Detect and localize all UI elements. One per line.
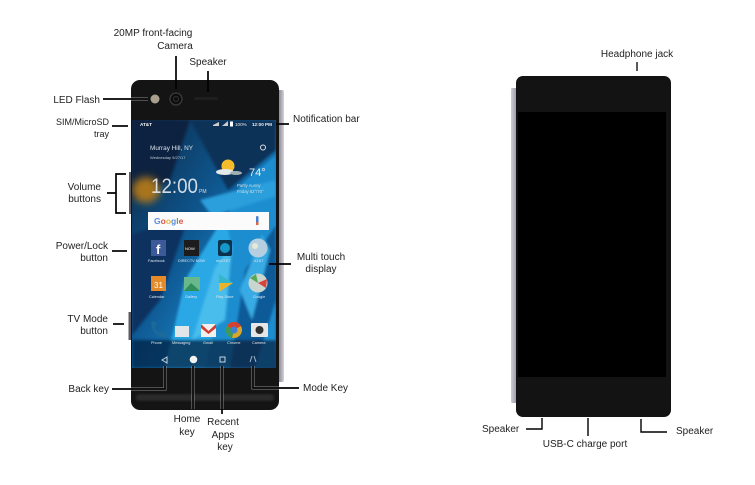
weather icon [222,160,234,172]
callout: headphone jack [601,49,674,71]
side frame [276,90,284,382]
app icons row 1: Facebook [148,259,165,263]
right phone [511,76,671,417]
clock and weather widget: Friday 82°/70° [237,189,264,194]
callout: power/lock button: Power/Lock [56,241,109,252]
screen [132,120,276,368]
callout: right speaker: Speaker [676,426,714,437]
black panel [518,112,666,377]
app icons row 2: Google [253,295,265,299]
app icons dock: Messaging [172,341,190,345]
status bar: 12:00 PM [252,122,272,127]
app icons row 1: AT&T [254,259,264,263]
Google search bar [148,212,269,230]
phone body [516,76,671,417]
callout: headphone jack: Headphone jack [601,49,674,60]
callout: notification bar: Notification bar [293,114,360,125]
callout: multi touch display: Multi touch [297,252,345,263]
status bar: AT&T [140,122,152,127]
callout: 20MP front-facing camera: Camera [157,41,193,52]
callout: SIM tray: tray [94,129,109,139]
app icons dock: Chrome [227,341,241,345]
navigation keys [162,356,256,363]
app icons row 1: f [156,242,161,257]
left phone [128,80,284,410]
callout: speaker: Speaker [189,57,227,68]
Google search bar: Google [154,216,184,226]
callout: back key [68,366,165,395]
callout: TV mode button [67,314,124,337]
orange wallpaper glow [132,177,160,203]
callout: power/lock button [56,241,127,264]
app icons dock: Camera [252,341,266,345]
clock and weather widget: 74° [249,167,266,179]
app icons row 2: 31 [154,281,163,290]
status bar: 100% [235,122,247,127]
app icons dock: Phone [151,341,162,345]
callout: recent apps key: Apps [212,430,234,441]
callout: left speaker: Speaker [482,424,520,435]
callout: 20MP front-facing camera: 20MP front-facing [114,28,192,39]
callout: LED flash: LED Flash [53,95,100,106]
callout: LED flash [53,95,148,106]
clock and weather widget: Murray Hill, NY [150,145,194,152]
earpiece speaker [194,97,218,100]
app icons dock: Gmail [203,341,213,345]
callout: left speaker [482,418,542,435]
app icons row 2: Calendar [149,295,165,299]
callout: volume buttons: buttons [68,194,101,205]
callout: home key [174,366,201,438]
wallpaper feathers [132,120,276,368]
callout: power/lock button: button [80,253,108,264]
callout: home key: Home [174,414,201,425]
callout: volume buttons [68,174,126,213]
callout: SIM tray [56,117,128,139]
callout: home key: key [179,427,195,438]
app icons row 1 [148,238,268,263]
app icons row 2 [149,274,268,299]
clock and weather widget: Wednesday 9/27/17 [150,155,186,160]
app icons row 2: Gallery [185,295,197,299]
callout: back key: Back key [68,384,109,395]
app icons row 2: Play Store [216,295,234,299]
app icons dock [151,321,268,345]
app icons row 1: NOW [185,246,195,251]
volume and TV mode side buttons [128,172,132,340]
callout: TV mode button: button [80,326,108,337]
callout: mode key: Mode Key [303,383,348,394]
callout: volume buttons: Volume [68,182,101,193]
callout: mode key [253,366,348,394]
callout: multi touch display: display [305,264,337,275]
app icons row 1: myAT&T [216,259,231,263]
callout: speaker [189,57,227,92]
callout: right speaker [641,419,714,437]
callout: SIM tray: SIM/MicroSD [56,117,109,127]
callout: recent apps key: Recent [207,417,239,428]
callout: 20MP front-facing camera [114,28,193,89]
phone body [131,80,279,410]
callout: USB-C charge port [543,418,627,450]
side frame [511,88,518,403]
status bar [140,121,272,127]
callout: recent apps key: key [217,442,233,453]
bottom bezel shading [136,394,274,401]
callout: USB-C charge port: USB-C charge port [543,439,627,450]
LED flash [150,94,160,104]
app icons row 1: DIRECTV NOW [178,259,205,263]
callout: recent apps key [207,366,239,453]
clock and weather widget: 12:00 [151,175,198,198]
front camera [170,93,182,105]
clock and weather widget: PM [199,189,206,195]
callout: TV mode button: TV Mode [67,314,108,325]
clock and weather widget: Partly Aunny [237,183,261,188]
callout: multi touch display [269,252,345,275]
clock and weather widget [150,145,266,198]
